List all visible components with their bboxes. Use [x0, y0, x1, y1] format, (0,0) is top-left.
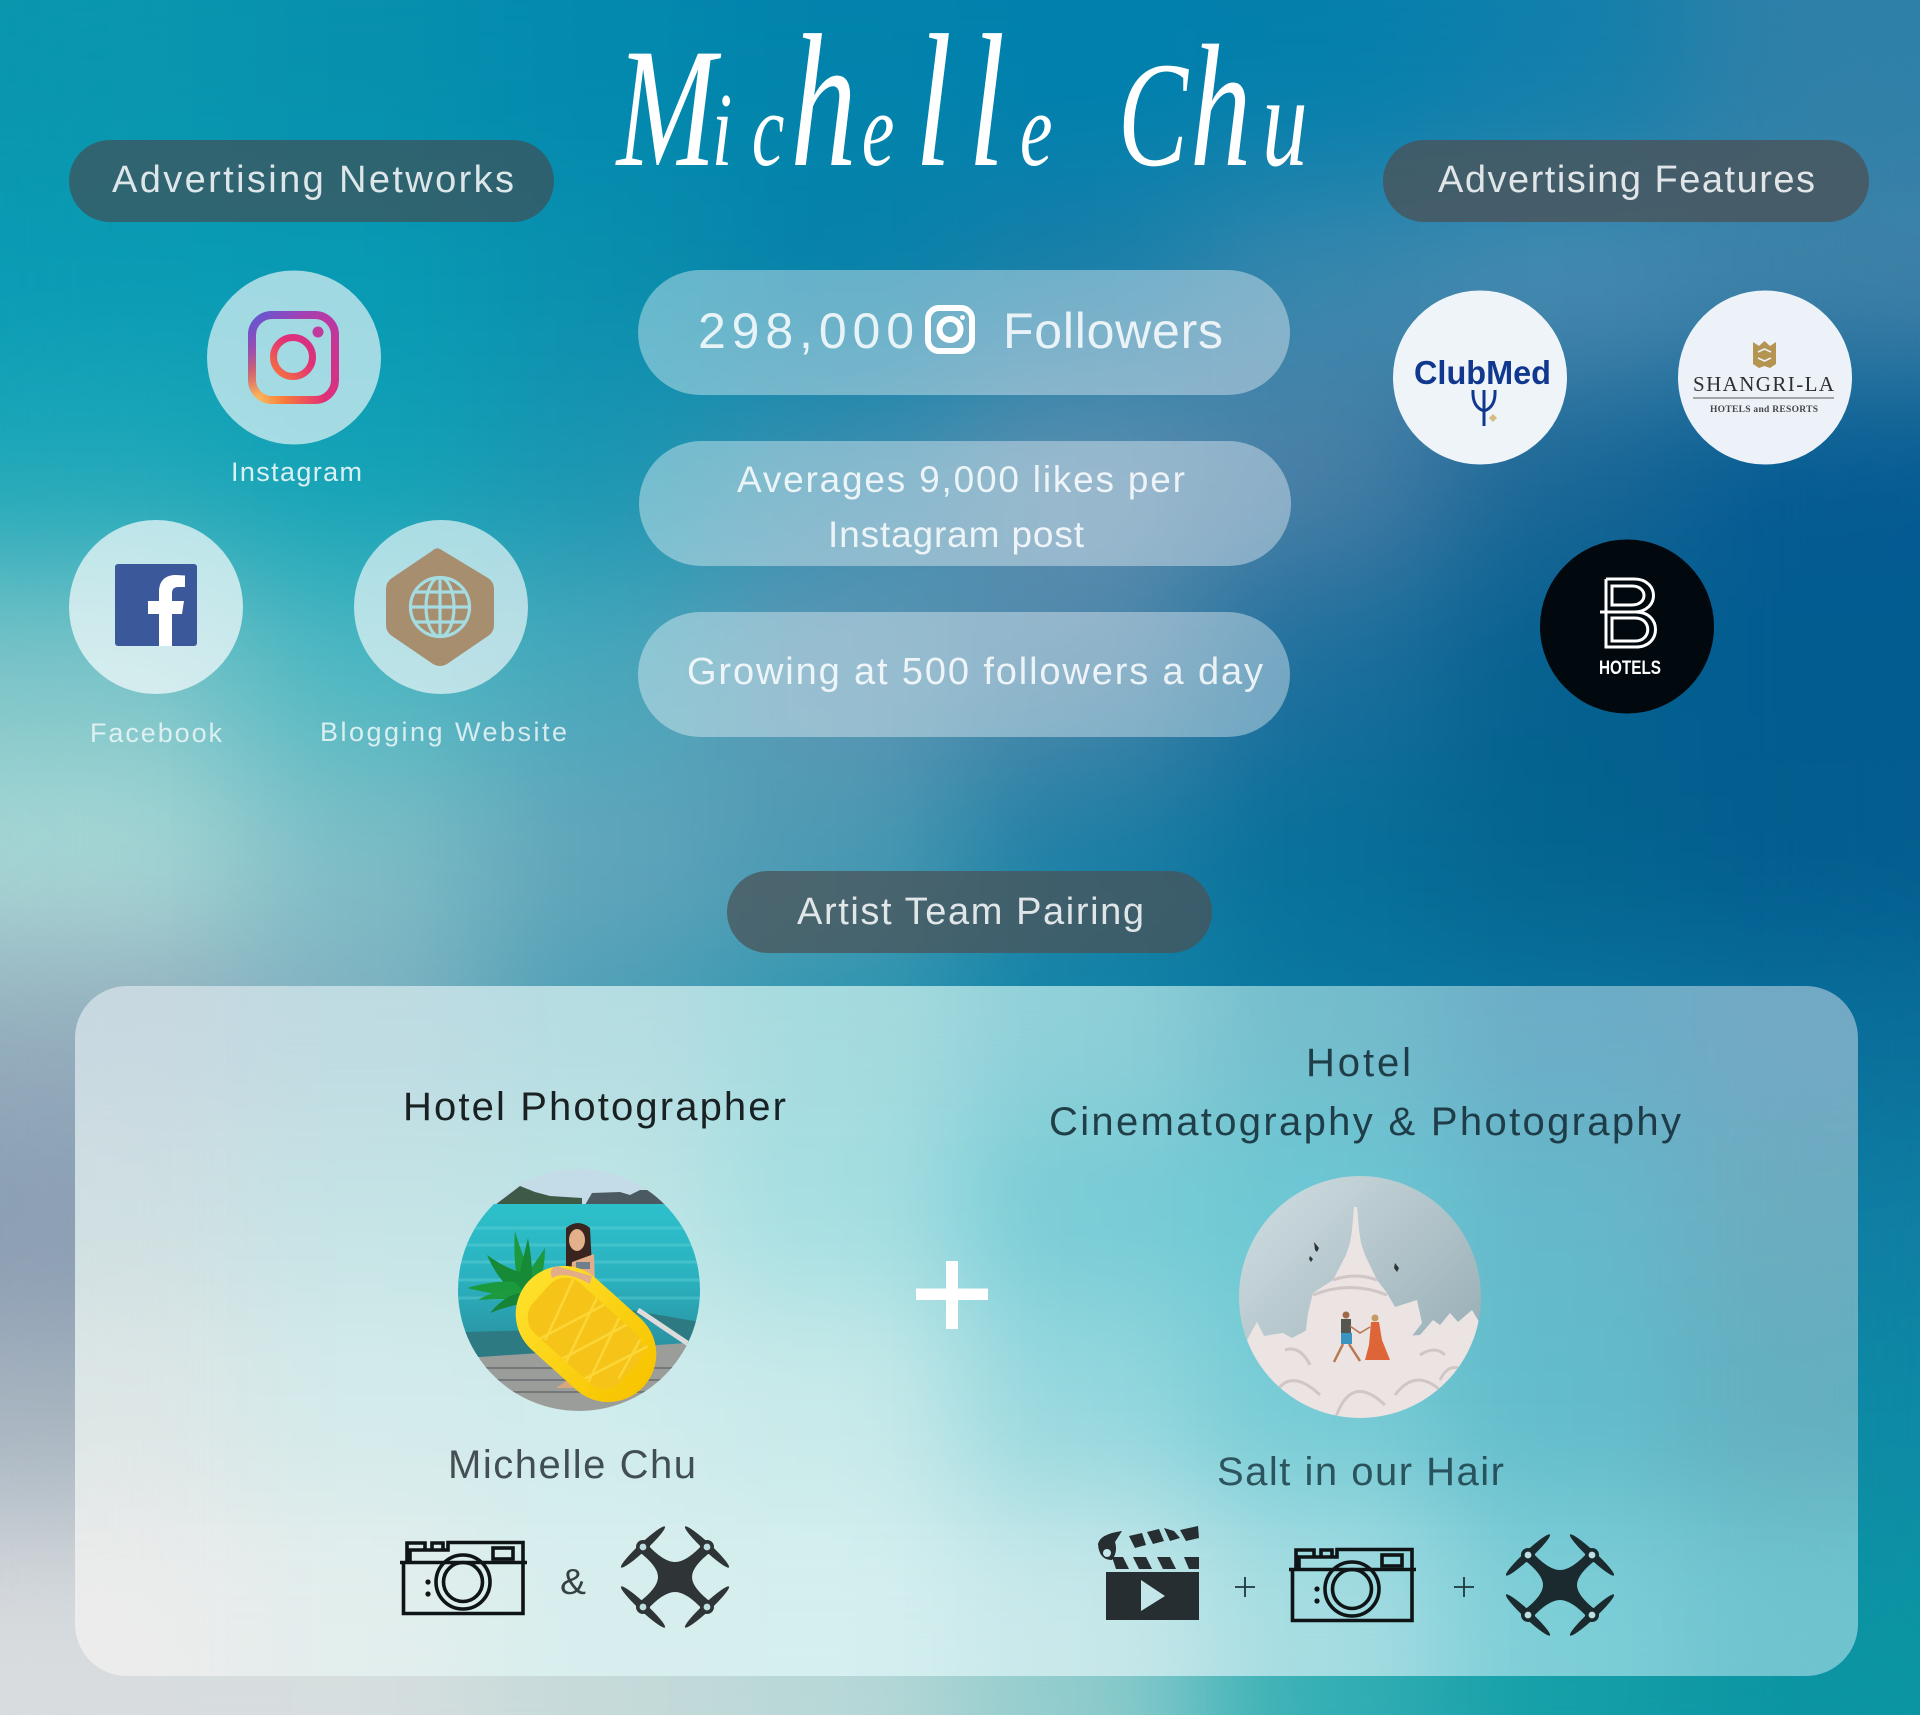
heading: Hotel Photographer: Hotel Photographer: [403, 1085, 786, 1129]
label: Blogging Website: Blogging Website: [320, 717, 567, 747]
title: l: [915, 0, 952, 207]
label: Facebook: Facebook: [90, 718, 222, 748]
title: h: [790, 0, 857, 207]
label: Michelle Chu: Michelle Chu: [448, 1443, 696, 1487]
symbol: small plus: [1235, 1577, 1255, 1597]
symbol: ampersand: &: [560, 1561, 586, 1602]
title: c: [752, 71, 784, 188]
title: e: [862, 71, 894, 188]
heading: Hotel Cinematography and Photography: [1049, 1041, 1681, 1144]
label: Salt in our Hair: Salt in our Hair: [1217, 1450, 1504, 1494]
stat pill: likes: Averages 9,000 likes per: [737, 459, 1185, 500]
heading: Hotel Cinematography and Photography: Cinematography & Photography: [1049, 1100, 1681, 1144]
heading pill: Advertising Networks: Advertising Networks: [112, 159, 514, 201]
title: l: [968, 0, 1005, 207]
heading pill: Advertising Features: Advertising Features: [1438, 159, 1815, 201]
icon: drone: [618, 1524, 732, 1630]
stat pill: growth: Growing at 500 followers a day: [687, 651, 1263, 693]
icon: blogging website: [354, 520, 528, 694]
symbol: small plus: [1454, 1577, 1474, 1597]
logo: Shangri-La: [1678, 290, 1852, 464]
icon: Instagram glyph: [928, 308, 972, 351]
stat pill: followers: Followers: [1003, 303, 1223, 359]
stat pill: followers: 298,000: [698, 303, 914, 359]
title: i: [712, 71, 732, 188]
panel: artist team pairing background: [75, 986, 1858, 1676]
photo: Michelle Chu with pineapple float: [458, 1169, 700, 1422]
title: M: [615, 13, 721, 202]
icon: drone: [1503, 1532, 1617, 1638]
title: e: [1020, 71, 1053, 188]
logo: Shangri-La: SHANGRI-LA: [1693, 372, 1835, 396]
icon: camera: [1289, 1550, 1416, 1620]
photo: temple with couple: [1239, 1176, 1483, 1420]
stat pill: likes: [639, 441, 1291, 566]
label: Instagram: Instagram: [231, 457, 362, 487]
heading pill: Advertising Features: [1383, 140, 1869, 222]
logo: B Hotels: [1540, 540, 1714, 714]
stat pill: growth: [638, 612, 1290, 737]
stat pill: followers: [638, 270, 1290, 395]
heading: Hotel Cinematography and Photography: Hotel: [1306, 1041, 1411, 1085]
title: u: [1262, 50, 1308, 194]
stat pill: likes: Instagram post: [828, 514, 1085, 555]
heading pill: Artist Team Pairing: Artist Team Pairing: [797, 891, 1144, 933]
title: C: [1118, 33, 1189, 199]
logo: Club Med: [1393, 290, 1567, 464]
logo: Shangri-La: HOTELS and RESORTS: [1710, 405, 1818, 415]
icon: Facebook network: [69, 520, 243, 694]
symbol: big plus: [916, 1261, 988, 1329]
logo: B Hotels: HOTELS: [1599, 658, 1661, 679]
icon: Instagram network: [207, 270, 381, 444]
icon: camera: [400, 1542, 527, 1614]
icon: film clapperboard: [1098, 1526, 1199, 1620]
heading pill: Artist Team Pairing: [727, 871, 1212, 953]
logo: Club Med: ClubMed: [1414, 354, 1551, 391]
heading pill: Advertising Networks: [69, 140, 554, 222]
title: h: [1190, 9, 1251, 203]
